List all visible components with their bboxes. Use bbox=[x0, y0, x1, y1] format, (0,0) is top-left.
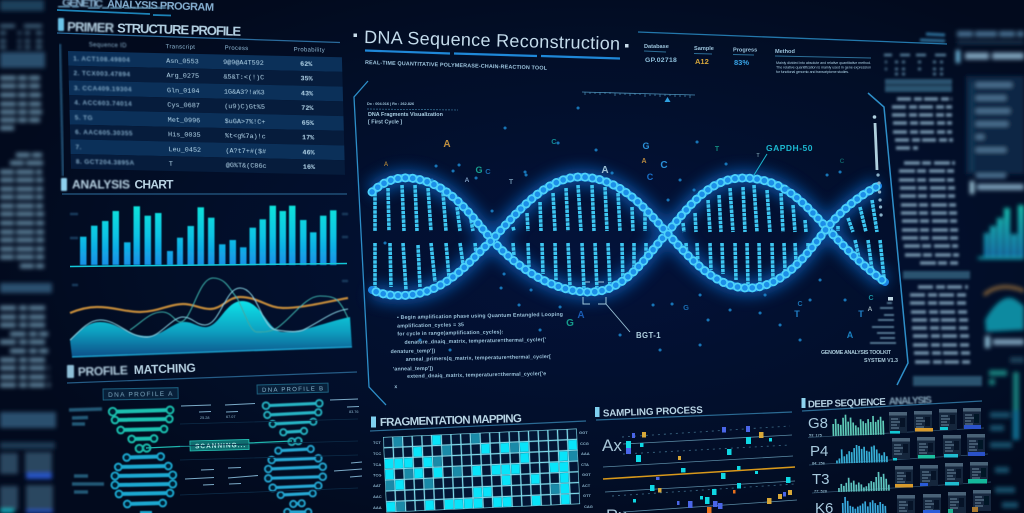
code block: amplification loop: for cycle in range(amplification_cycles): bbox=[397, 329, 504, 337]
table header: Probability bbox=[294, 47, 325, 54]
heading: deep sequence analysis: DEEP SEQUENCE bbox=[808, 397, 887, 410]
helix particles bbox=[385, 108, 845, 350]
row separators bbox=[808, 428, 991, 493]
heading rule bbox=[67, 372, 357, 383]
toolkit caption: SYSTEM V1.3 bbox=[864, 358, 898, 364]
progress field bbox=[733, 48, 757, 67]
grid row labels right: GGT bbox=[579, 430, 588, 435]
tag: DNA profile A: DNA PROFILE A bbox=[108, 391, 174, 399]
transcript, process, probability columns: T bbox=[169, 161, 173, 169]
grid row labels right: CAG bbox=[584, 504, 593, 509]
table row bands bbox=[68, 51, 345, 175]
method field: Method bbox=[775, 49, 795, 55]
panel: right blurred data column bbox=[884, 34, 982, 386]
glow behind helix bbox=[372, 177, 885, 295]
right bracket bbox=[868, 93, 908, 385]
code block: amplification loop: ▪ Begin amplification phase using Quantum Entangled Looping bbox=[397, 312, 563, 321]
panel: deep sequence analysis bbox=[802, 395, 991, 513]
floating nucleotide letters: G bbox=[475, 165, 483, 175]
sequence id column bbox=[73, 56, 135, 167]
vertical slider bbox=[875, 123, 877, 170]
panel: analysis chart bbox=[61, 178, 352, 357]
grid row labels left: TCG bbox=[373, 472, 381, 478]
sequence id column: 2. TCX003.47894 bbox=[73, 70, 131, 79]
heading: deep sequence analysis bbox=[808, 395, 932, 410]
floating nucleotide letters: C bbox=[647, 172, 654, 182]
legend square bbox=[888, 297, 893, 300]
method field: Mainly divided into absolute and relative quantitative method. bbox=[776, 61, 871, 65]
panel: far right blurred column bbox=[956, 34, 1024, 505]
code block: amplification loop: 'anneal_temp']) bbox=[393, 366, 433, 373]
floating nucleotide letters: T bbox=[715, 146, 720, 153]
heading rule bbox=[596, 412, 792, 420]
method field: for functional genomic and transcriptome studies. bbox=[776, 70, 849, 74]
marker: deep sequence heading bbox=[802, 398, 806, 408]
heat grid bbox=[383, 429, 580, 513]
sequence id column: 5. TG bbox=[75, 114, 93, 122]
heading: sampling process: SAMPLING PROCESS bbox=[603, 405, 703, 419]
top heading band bbox=[957, 31, 1024, 37]
grid row labels right: ACT bbox=[582, 483, 591, 488]
panel: profile matching bbox=[67, 361, 362, 513]
floating nucleotide letters bbox=[384, 137, 874, 340]
marker: fragmentation heading bbox=[371, 416, 376, 428]
sample field bbox=[694, 46, 714, 66]
floating nucleotide letters: A bbox=[465, 177, 470, 184]
ladder: profile A bbox=[109, 406, 176, 513]
sample field: Sample bbox=[694, 46, 714, 52]
callout: GAPDH-50: GAPDH-50 bbox=[766, 143, 813, 153]
heading: profile matching: MATCHING bbox=[134, 361, 196, 377]
panel: primer structure profile bbox=[57, 18, 345, 176]
right control strip bbox=[873, 115, 881, 215]
sequence id column: 1. ACT108.49804 bbox=[73, 56, 130, 64]
table: primer rows bbox=[68, 42, 345, 175]
light line bbox=[70, 288, 348, 340]
markers: cyan bbox=[626, 437, 790, 504]
cards bbox=[897, 490, 991, 513]
floating nucleotide letters: T bbox=[858, 309, 864, 319]
transcript, process, probability columns: 9@9@A4T592 bbox=[223, 59, 264, 68]
row: P4 bbox=[810, 434, 985, 466]
cards bbox=[889, 408, 981, 434]
code block: amplification loop: denature_dnaiq_matrix, temperature=thermal_cycler[' bbox=[404, 337, 546, 346]
floating nucleotide letters: G bbox=[566, 318, 574, 329]
left bracket bbox=[354, 81, 386, 405]
transcript, process, probability columns: 43% bbox=[301, 90, 314, 98]
grid row labels right: GGT bbox=[582, 472, 591, 477]
bottom rule bbox=[72, 347, 352, 357]
transcript, process, probability columns: Met_0996 bbox=[168, 117, 200, 125]
grid row labels left: TCT bbox=[373, 440, 381, 445]
faint chart axis ticks bbox=[70, 214, 348, 285]
method field bbox=[775, 49, 871, 74]
method field: The relative quantification is mainly used in gene expression bbox=[776, 66, 871, 70]
marker: profile heading bbox=[67, 365, 74, 378]
tag: DNA profile A bbox=[103, 388, 178, 400]
transcript, process, probability columns: 65% bbox=[302, 120, 315, 128]
cards bbox=[892, 434, 985, 460]
cards bbox=[895, 462, 988, 488]
top rule bbox=[638, 32, 947, 44]
sequence id column: 3. CCA409.19304 bbox=[74, 85, 132, 93]
helix rungs bbox=[375, 185, 884, 290]
tag: DNA profile B: DNA PROFILE B bbox=[262, 386, 324, 394]
primer table stub bbox=[966, 76, 1024, 174]
floating nucleotide letters: C bbox=[551, 137, 557, 146]
transcript, process, probability columns: 1G&A3?!a%3 bbox=[224, 88, 265, 97]
sparkline bbox=[833, 414, 883, 436]
floating nucleotide letters: C bbox=[485, 167, 491, 176]
slider dots bbox=[878, 175, 881, 215]
floating nucleotide letters: G bbox=[642, 141, 650, 151]
tag: DNA profile B bbox=[257, 383, 328, 394]
bright cells bbox=[384, 429, 579, 512]
grid row labels left bbox=[373, 440, 382, 510]
visualization caption bbox=[368, 112, 443, 126]
teal line bbox=[130, 278, 348, 332]
floating nucleotide letters: T bbox=[794, 309, 800, 319]
value: 53: 175 bbox=[809, 434, 822, 438]
row: T3 bbox=[812, 462, 988, 494]
transcript, process, probability columns bbox=[166, 58, 316, 172]
code block: amplification loop bbox=[390, 312, 564, 390]
marker: primer heading bbox=[58, 18, 64, 31]
floating nucleotide letters: A bbox=[443, 139, 451, 150]
grid row labels right: GTT bbox=[583, 493, 592, 498]
toolkit caption bbox=[821, 350, 898, 364]
coordinates readout: Dx : 004.016 | Rx : 262.826 bbox=[367, 102, 414, 106]
title underline segments bbox=[365, 50, 620, 58]
transcript, process, probability columns: 35% bbox=[300, 75, 314, 84]
top dot bbox=[873, 115, 876, 119]
code block: amplification loop: anneal_primers(q_matrix, temperature=thermal_cycler[ bbox=[406, 354, 551, 363]
markers: amber bbox=[642, 432, 792, 504]
panel: top left program heading bbox=[57, 0, 214, 15]
heading: profile matching bbox=[78, 361, 196, 379]
floating nucleotide letters: A bbox=[847, 330, 854, 340]
grid row labels right: CCG bbox=[580, 441, 589, 446]
grid row labels right bbox=[579, 430, 593, 509]
heading rule bbox=[802, 401, 982, 411]
sub text: program note bbox=[58, 6, 170, 8]
table header bbox=[89, 42, 325, 54]
strand A beads bbox=[372, 178, 885, 292]
database field: GP.02718 bbox=[645, 57, 677, 64]
heading rule bbox=[370, 421, 586, 431]
floating nucleotide letters: T bbox=[509, 179, 514, 186]
dashed divider bbox=[367, 109, 458, 110]
panel: helix viewport frame bbox=[354, 81, 908, 405]
sample field: A12 bbox=[695, 57, 709, 66]
side data marks bbox=[181, 399, 362, 485]
vertical side rule bbox=[60, 44, 63, 176]
floating nucleotide letters: A bbox=[868, 306, 873, 313]
heading: DNA sequence reconstruction bbox=[354, 27, 628, 72]
heading: analysis chart bbox=[72, 178, 174, 192]
heading: deep sequence analysis: ANALYSIS bbox=[889, 395, 932, 408]
markers: orange bbox=[707, 490, 736, 513]
heading: analysis chart: ANALYSIS bbox=[72, 178, 130, 192]
table header: Sequence ID bbox=[89, 42, 127, 49]
code: P4 bbox=[810, 443, 828, 460]
panel: far left blurred column bbox=[0, 0, 56, 513]
analysis marker and title bbox=[970, 181, 974, 194]
transcript, process, probability columns: 62% bbox=[300, 61, 313, 69]
panel: sampling process bbox=[595, 405, 797, 513]
progress field: 83% bbox=[734, 58, 749, 67]
track solid lines bbox=[603, 435, 797, 512]
transcript, process, probability columns: %t<g%7a)!c bbox=[225, 133, 266, 142]
grid row labels right: AAA bbox=[581, 451, 590, 456]
area fill bbox=[70, 301, 352, 357]
lower panel blocks bbox=[1010, 357, 1024, 363]
dim cells bbox=[384, 429, 579, 512]
side data numbers: 25.28 bbox=[200, 416, 210, 420]
floating nucleotide letters: T bbox=[756, 153, 760, 159]
bar chart baseline bbox=[70, 264, 347, 266]
table header: Transcript bbox=[166, 44, 195, 51]
sparkline bbox=[843, 496, 885, 513]
illustration: DNA helix bbox=[372, 177, 885, 295]
transcript, process, probability columns: Leu_0452 bbox=[168, 146, 201, 155]
value: 77: 528 bbox=[814, 490, 827, 494]
transcript, process, probability columns: His_0035 bbox=[168, 131, 201, 140]
highlight track bbox=[603, 467, 795, 479]
side data numbers: 83.76 bbox=[349, 410, 359, 414]
floating nucleotide letters: G bbox=[683, 303, 689, 312]
transcript, process, probability columns: 72% bbox=[301, 105, 315, 113]
table header: Process bbox=[225, 46, 249, 52]
sequence id column: 6. AAC605.30355 bbox=[75, 129, 133, 137]
callout: BGT-1 bbox=[583, 282, 661, 340]
panel: genome toolkit label bbox=[821, 297, 898, 364]
grid row labels left: AAT bbox=[373, 483, 381, 488]
floating nucleotide letters: A bbox=[384, 162, 389, 168]
floating nucleotide letters: A bbox=[601, 165, 609, 176]
heading: primer structure profile: PRIMER bbox=[67, 19, 115, 35]
sparkline bbox=[839, 472, 889, 492]
title text: DNA Sequence Reconstruction bbox=[364, 27, 620, 54]
floating nucleotide letters: A bbox=[577, 310, 585, 321]
grid base bbox=[383, 429, 580, 513]
transcript, process, probability columns: Cys_0687 bbox=[167, 102, 200, 111]
callout: GAPDH-50 bbox=[754, 143, 813, 175]
primer marker and title bbox=[956, 50, 960, 63]
floating nucleotide letters: C bbox=[868, 295, 874, 302]
strand B beads bbox=[372, 177, 878, 295]
faint scan row lines bbox=[180, 419, 358, 495]
code: G8 bbox=[808, 415, 828, 432]
series label: Ax: Ax bbox=[602, 436, 622, 455]
heading: analysis chart: CHART bbox=[134, 178, 174, 192]
visualization caption: [ First Cycle ] bbox=[368, 120, 402, 126]
code: T3 bbox=[812, 471, 830, 488]
sequence id column: 7. bbox=[75, 144, 82, 151]
sparkline bbox=[837, 444, 887, 464]
markers: blue bbox=[626, 426, 786, 509]
side data numbers: 67.07 bbox=[226, 415, 236, 419]
heading rule bbox=[57, 33, 340, 42]
code block: amplification loop: x bbox=[394, 384, 397, 390]
value: 84: 256 bbox=[812, 462, 825, 466]
analysis bars stub bbox=[984, 205, 1024, 257]
database field bbox=[644, 44, 677, 64]
bar chart bbox=[80, 206, 336, 265]
grid row labels right: CTA bbox=[581, 462, 589, 467]
area chart bbox=[70, 278, 352, 357]
grid row labels left: TCC bbox=[373, 451, 381, 456]
badge: scanning bbox=[190, 439, 249, 451]
track dotted lines bbox=[612, 426, 795, 496]
heading: primer structure profile: STRUCTURE PROFILE bbox=[117, 20, 242, 39]
subtitle: REAL-TIME QUANTITATIVE POLYMERASE-CHAIN-REACTION TOOL bbox=[365, 60, 548, 72]
progress field: Progress bbox=[733, 48, 757, 54]
sequence id column: 8. GCT204.3895A bbox=[76, 159, 135, 167]
toolkit caption: GENOME ANALYSIS TOOLKIT bbox=[821, 350, 892, 356]
orange arc stub bbox=[984, 287, 1024, 295]
grid row labels left: AAC bbox=[373, 494, 382, 499]
ruler bbox=[582, 92, 695, 102]
badge: scanning: SCANNING... bbox=[195, 442, 246, 450]
transcript, process, probability columns: (u9)C)Gt%5 bbox=[224, 103, 265, 112]
code block: amplification loop: amplification_cycles = 35 bbox=[397, 322, 464, 329]
transcript, process, probability columns: @G%T&(C86c bbox=[226, 162, 267, 171]
marker: sampling heading bbox=[595, 407, 600, 417]
transcript, process, probability columns: Arg_0275 bbox=[166, 72, 199, 81]
panel: fragmentation mapping bbox=[370, 413, 593, 513]
transcript, process, probability columns: Gln_0104 bbox=[167, 87, 200, 96]
connector: scanning link bbox=[146, 441, 292, 448]
transcript, process, probability columns: $uGA>7%!C+ bbox=[225, 118, 266, 127]
transcript, process, probability columns: 16% bbox=[303, 164, 316, 172]
database field: Database bbox=[644, 44, 669, 50]
floating nucleotide letters: A bbox=[641, 158, 647, 165]
ladder: profile B bbox=[262, 400, 326, 513]
grid row labels left: AAA bbox=[373, 505, 382, 510]
heading: profile matching: PROFILE bbox=[78, 363, 128, 379]
floating nucleotide letters: C bbox=[660, 160, 668, 171]
area chart stub bbox=[985, 298, 1024, 332]
row: G8 bbox=[808, 408, 981, 438]
callout: BGT-1: BGT-1 bbox=[636, 331, 661, 340]
blurred side labels bbox=[69, 409, 104, 492]
heading rule bbox=[62, 193, 347, 195]
marker: analysis heading bbox=[61, 178, 67, 191]
marker: title end bbox=[625, 44, 628, 48]
row: K6 bbox=[815, 490, 991, 513]
grid row labels left: TCA bbox=[373, 462, 381, 467]
transcript, process, probability columns: 17% bbox=[302, 134, 315, 143]
transcript, process, probability columns: Asn_0553 bbox=[166, 58, 199, 66]
floating nucleotide letters: C bbox=[797, 301, 803, 308]
code block: amplification loop: extend_dnaiq_matrix, temperature=thermal_cycler['e bbox=[407, 371, 546, 380]
transcript, process, probability columns: 46% bbox=[302, 149, 316, 157]
progress underline bbox=[57, 10, 171, 16]
sequence id column: 4. ACC603.74014 bbox=[74, 100, 132, 108]
side data numbers bbox=[200, 410, 359, 420]
profile marker and title bbox=[985, 336, 990, 348]
transcript, process, probability columns: &5&T:<(!)C bbox=[223, 74, 264, 83]
heading: fragmentation mapping: FRAGMENTATION MAPPING bbox=[380, 413, 522, 429]
marker: title start bbox=[354, 34, 357, 37]
transcript, process, probability columns: (A?t7+#($# bbox=[225, 147, 266, 156]
heading: primer structure profile bbox=[67, 19, 242, 39]
panel: run details bbox=[638, 32, 947, 74]
orange line bbox=[70, 297, 348, 313]
floating nucleotide letters: C bbox=[840, 158, 845, 165]
code block: amplification loop: denature_temp']) bbox=[391, 348, 436, 355]
small legend lines bbox=[870, 303, 896, 343]
visualization caption: DNA Fragments Visualization bbox=[368, 112, 443, 118]
